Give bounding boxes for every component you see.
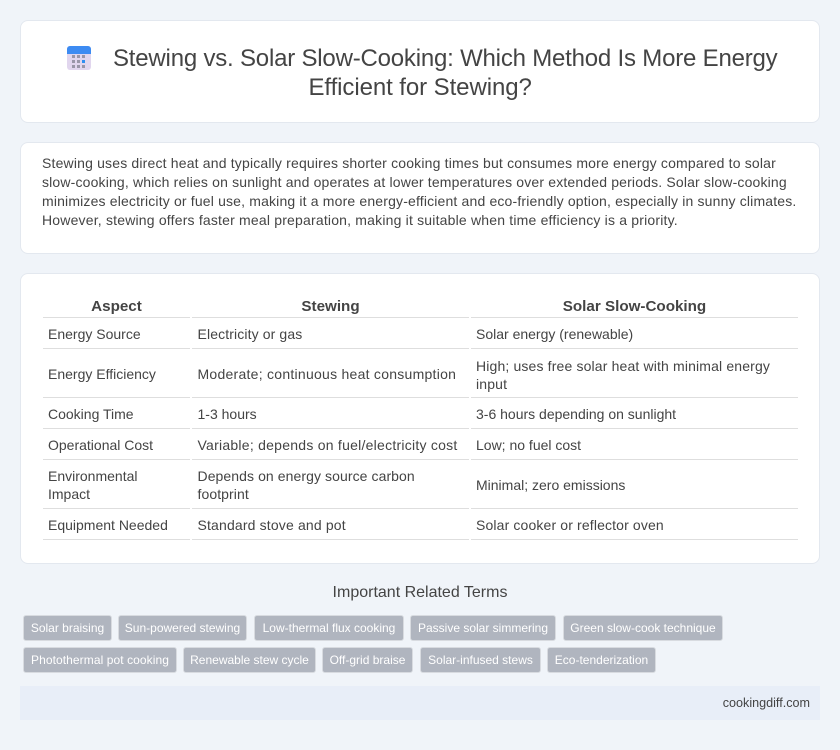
intro paragraph: slow-cooking, which relies on sunlight and operates at lower temperatures over extended periods. Solar slow-cooking	[42, 174, 787, 190]
footer source: cookingdiff.com	[723, 696, 810, 710]
table header: Solar Slow-Cooking	[563, 298, 706, 315]
tags: related terms: Low-thermal flux cooking	[263, 621, 395, 635]
row: environmental impact: Depends on energy source carbon	[198, 468, 415, 484]
row: cooking time: Cooking Time	[48, 406, 134, 422]
row: energy source: Energy Source	[48, 326, 141, 342]
row: energy efficiency: Energy Efficiency	[48, 366, 156, 382]
row: environmental impact: Impact	[48, 486, 90, 502]
row: energy source: Electricity or gas	[198, 326, 302, 342]
row: environmental impact: Environmental	[48, 468, 138, 484]
row: equipment needed: Solar cooker or reflector oven	[476, 517, 664, 533]
row: environmental impact: footprint	[198, 486, 249, 502]
intro paragraph	[42, 155, 796, 228]
row: operational cost: Variable; depends on fuel/electricity cost	[198, 437, 458, 453]
row: energy efficiency: Moderate; continuous heat consumption	[198, 366, 456, 382]
tags: related terms: Sun-powered stewing	[125, 621, 240, 635]
row: operational cost: Operational Cost	[48, 437, 153, 453]
table header: Aspect	[91, 298, 142, 315]
row: environmental impact: Minimal; zero emissions	[476, 477, 625, 493]
row: operational cost	[48, 437, 581, 453]
row: equipment needed: Equipment Needed	[48, 517, 168, 533]
intro paragraph: minimizes electricity or fuel use, making it a more energy-efficient and eco-friendly option, especially in sunny climates.	[42, 193, 796, 209]
tags: related terms: Solar-infused stews	[428, 653, 533, 667]
tags: related terms: Off-grid braise	[330, 653, 405, 667]
table header: Stewing	[301, 298, 360, 315]
tags: related terms: Eco-tenderization	[555, 653, 648, 667]
title	[113, 45, 778, 101]
row: equipment needed	[48, 517, 664, 533]
panel: comparison table	[20, 273, 820, 564]
tags: related terms: Solar braising	[31, 621, 104, 635]
heading: related terms: Important Related Terms	[333, 584, 507, 601]
tags: related terms: Green slow-cook technique	[570, 621, 716, 635]
row: energy efficiency: High; uses free solar heat with minimal energy	[476, 358, 770, 374]
row: energy source: Solar energy (renewable)	[476, 326, 633, 342]
tags: related terms: Renewable stew cycle	[190, 653, 309, 667]
panel: intro text	[20, 142, 820, 254]
table header	[91, 298, 706, 315]
tags: related terms	[23, 615, 723, 673]
row: energy efficiency: input	[476, 376, 507, 392]
tags: related terms: Photothermal pot cooking	[31, 653, 169, 667]
row: energy efficiency	[48, 358, 770, 392]
row: environmental impact	[48, 468, 625, 502]
intro paragraph: However, stewing offers faster meal preparation, making it suitable when time efficiency is a priority.	[42, 212, 678, 228]
row: equipment needed: Standard stove and pot	[198, 517, 346, 533]
footer bar	[20, 686, 820, 720]
tags: related terms: Passive solar simmering	[418, 621, 548, 635]
panel: title card	[20, 20, 820, 123]
title: Stewing vs. Solar Slow-Cooking: Which Method Is More Energy	[113, 45, 777, 72]
row: cooking time: 1-3 hours	[198, 406, 257, 422]
row: operational cost: Low; no fuel cost	[476, 437, 581, 453]
title: Efficient for Stewing?	[308, 74, 532, 101]
icon: calendar	[67, 46, 91, 70]
row: cooking time: 3-6 hours depending on sunlight	[476, 406, 676, 422]
row: cooking time	[48, 406, 676, 422]
intro paragraph: Stewing uses direct heat and typically requires shorter cooking times but consumes more energy compared to solar	[42, 155, 776, 171]
row: energy source	[48, 326, 633, 342]
